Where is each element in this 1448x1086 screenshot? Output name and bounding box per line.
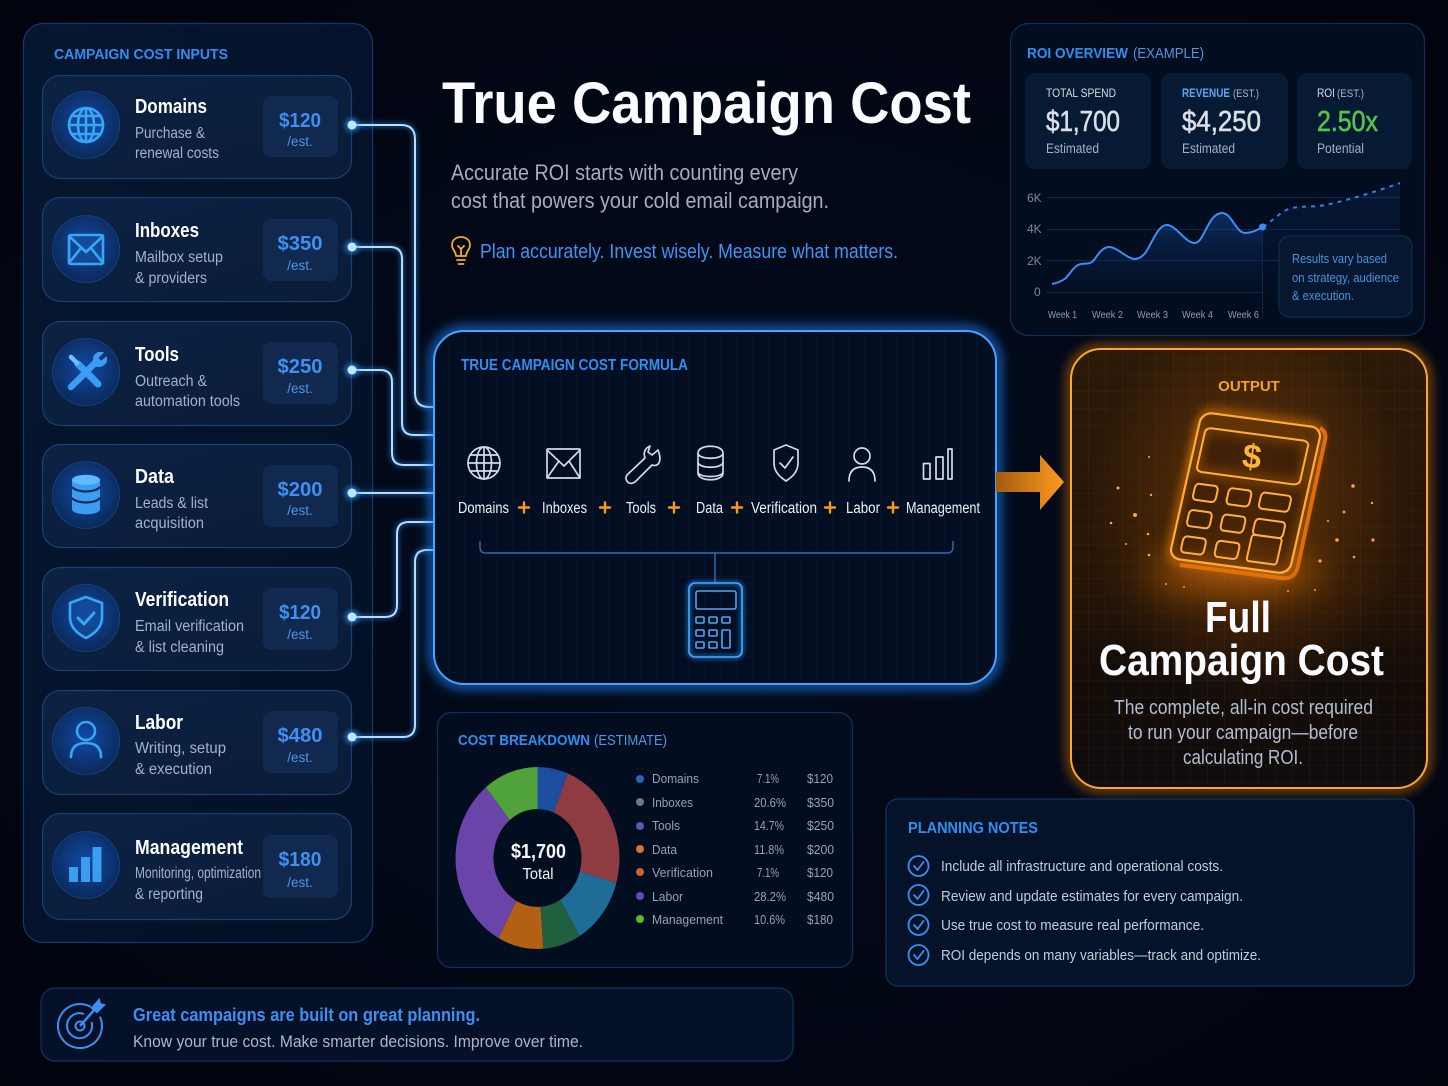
line chart: 4K xyxy=(1027,222,1042,236)
stat: revenue xyxy=(1161,73,1288,169)
price: data: /est. xyxy=(287,503,313,518)
icon: database xyxy=(52,462,120,528)
stat: total spend: $1,700 xyxy=(1046,106,1120,138)
output description xyxy=(1114,697,1373,769)
formula icons xyxy=(468,445,952,483)
title: True Campaign Cost xyxy=(442,71,971,136)
stat: revenue: REVENUE xyxy=(1182,86,1230,100)
breakdown heading: (ESTIMATE) xyxy=(594,733,667,749)
price: labor: /est. xyxy=(287,750,313,765)
price: tools xyxy=(263,342,338,404)
notes list: ROI depends on many variables—track and optimize. xyxy=(941,947,1261,964)
legend: $250 xyxy=(807,819,834,833)
notes heading: PLANNING NOTES xyxy=(908,820,1038,837)
card: management xyxy=(42,814,352,920)
card: labor: & execution xyxy=(135,761,212,778)
legend: 7.1% xyxy=(757,772,779,786)
card: verification: Verification xyxy=(135,589,229,611)
calculator illustration xyxy=(1110,412,1375,592)
legend: $120 xyxy=(807,866,833,880)
formula labels: Inboxes xyxy=(542,500,587,517)
legend xyxy=(636,772,834,927)
output description: calculating ROI. xyxy=(1183,747,1303,769)
notes list: Review and update estimates for every campaign. xyxy=(941,888,1243,905)
legend: Management xyxy=(652,913,724,927)
intro text: Accurate ROI starts with counting every xyxy=(451,160,799,185)
notes list xyxy=(941,858,1261,964)
panel: ROI overview xyxy=(1010,24,1424,336)
card: tools: automation tools xyxy=(135,393,240,410)
intro text: cost that powers your cold email campaign. xyxy=(451,188,829,213)
breakdown heading: COST BREAKDOWN xyxy=(458,733,590,749)
price: management: /est. xyxy=(287,875,313,890)
panel: planning notes xyxy=(886,799,1414,986)
stat: revenue: Estimated xyxy=(1182,141,1235,156)
panel: output xyxy=(1071,349,1427,788)
ROI heading xyxy=(1027,45,1204,62)
line chart xyxy=(1027,183,1400,321)
panel: campaign cost inputs xyxy=(24,24,372,942)
price: domains: $120 xyxy=(279,110,321,132)
card: management: Management xyxy=(135,837,243,859)
icon: light bulb xyxy=(452,237,470,264)
banner: great planning xyxy=(41,988,793,1061)
notes list: Include all infrastructure and operational costs. xyxy=(941,858,1223,875)
card: inboxes xyxy=(42,198,352,302)
price: tools: $250 xyxy=(278,356,322,378)
formula labels xyxy=(458,500,981,517)
legend: Domains xyxy=(652,772,699,786)
card: data: Leads & list xyxy=(135,495,209,512)
icon: person xyxy=(52,708,120,774)
formula labels: Verification xyxy=(751,500,817,517)
stat: total spend: Estimated xyxy=(1046,141,1099,156)
legend: 14.7% xyxy=(754,819,784,833)
icon: envelope xyxy=(52,216,120,282)
icon: shield xyxy=(52,584,120,652)
price: data xyxy=(263,465,338,527)
price: verification: $120 xyxy=(279,602,321,624)
card: management: Monitoring, optimization xyxy=(135,865,261,882)
legend: Inboxes xyxy=(652,796,693,810)
card: labor: Labor xyxy=(135,712,183,734)
stat: ROI: 2.50x xyxy=(1317,106,1378,138)
legend: Verification xyxy=(652,866,713,880)
note: results vary: Results vary based xyxy=(1292,252,1387,266)
line chart: Week 4 xyxy=(1182,309,1213,321)
formula labels: Domains xyxy=(458,500,509,517)
legend: $120 xyxy=(807,772,833,786)
card: domains: Purchase & xyxy=(135,125,206,142)
legend: Labor xyxy=(652,890,683,904)
icon: calculator xyxy=(689,583,742,657)
stat: ROI: (EST.) xyxy=(1337,88,1364,100)
stat: revenue: $4,250 xyxy=(1182,106,1261,138)
price: tools: /est. xyxy=(287,381,313,396)
calculator illustration: $ xyxy=(1240,437,1264,477)
icon: globe xyxy=(52,92,120,158)
arrow: formula to output xyxy=(996,455,1064,510)
notes list: Use true cost to measure real performance. xyxy=(941,917,1204,934)
output title: Campaign Cost xyxy=(1099,636,1384,685)
price: inboxes: /est. xyxy=(287,258,313,273)
price: management xyxy=(263,835,338,898)
line chart: 6K xyxy=(1027,191,1042,205)
bracket xyxy=(480,541,953,583)
ROI heading: (EXAMPLE) xyxy=(1133,45,1204,62)
price: verification: /est. xyxy=(287,627,313,642)
price: domains xyxy=(263,96,338,157)
legend: Tools xyxy=(652,819,680,833)
price: inboxes xyxy=(263,219,338,281)
legend: 28.2% xyxy=(754,890,786,904)
price: labor: $480 xyxy=(278,725,322,747)
line chart: Week 6 xyxy=(1228,309,1259,321)
icon: target xyxy=(58,1000,104,1048)
panel: formula xyxy=(434,331,996,684)
note: results vary: on strategy, audience xyxy=(1292,271,1399,285)
tagline: Plan accurately. Invest wisely. Measure what matters. xyxy=(480,240,898,263)
note: results vary: & execution. xyxy=(1292,289,1354,303)
card: verification: & list cleaning xyxy=(135,639,224,656)
line chart: Week 3 xyxy=(1137,309,1168,321)
card: labor: Writing, setup xyxy=(135,740,226,757)
line chart: Week 1 xyxy=(1048,309,1077,321)
card: domains: Domains xyxy=(135,96,207,118)
card: domains: renewal costs xyxy=(135,145,219,162)
card: verification: Email verification xyxy=(135,618,244,635)
card: verification xyxy=(42,568,352,670)
panel heading: CAMPAIGN COST INPUTS xyxy=(54,46,228,63)
stat: total spend: TOTAL SPEND xyxy=(1046,86,1116,100)
icon: wrench and screwdriver xyxy=(52,338,120,406)
price: domains: /est. xyxy=(287,134,313,149)
legend: $200 xyxy=(807,843,834,857)
card: tools: Tools xyxy=(135,344,179,366)
legend: $480 xyxy=(807,890,834,904)
banner: great planning: Know your true cost. Make smarter decisions. Improve over time. xyxy=(133,1033,583,1051)
legend: 20.6% xyxy=(754,796,786,810)
note: results vary xyxy=(1279,236,1412,317)
price: inboxes: $350 xyxy=(278,233,322,255)
plus signs xyxy=(519,502,898,512)
donut total xyxy=(511,841,566,883)
price: labor xyxy=(263,711,338,773)
card: inboxes: Mailbox setup xyxy=(135,249,223,266)
stat: ROI: ROI xyxy=(1317,86,1335,100)
check icons xyxy=(908,856,928,965)
card: tools: Outreach & xyxy=(135,373,208,390)
donut chart xyxy=(456,767,619,949)
icon: bar chart xyxy=(52,832,120,898)
formula labels: Data xyxy=(696,500,723,517)
stat: ROI: Potential xyxy=(1317,141,1364,156)
output heading: OUTPUT xyxy=(1218,378,1280,395)
card: data xyxy=(42,444,352,548)
output title xyxy=(1099,593,1384,685)
output description: to run your campaign—before xyxy=(1128,722,1358,744)
connectors: inputs to formula xyxy=(345,118,434,744)
line chart: 2K xyxy=(1027,254,1042,268)
donut total: $1,700 xyxy=(511,841,566,863)
card: inboxes: & providers xyxy=(135,270,207,287)
legend: 7.1% xyxy=(757,866,779,880)
card: tools xyxy=(42,322,352,426)
formula labels: Tools xyxy=(626,500,656,517)
stat: revenue: (EST.) xyxy=(1233,88,1259,100)
output description: The complete, all-in cost required xyxy=(1114,697,1373,719)
legend: 11.8% xyxy=(754,843,784,857)
card: management: & reporting xyxy=(135,886,203,903)
breakdown heading xyxy=(458,733,667,749)
ROI heading: ROI OVERVIEW xyxy=(1027,45,1129,62)
output title: Full xyxy=(1205,593,1271,642)
card: labor xyxy=(42,690,352,794)
line chart: 0 xyxy=(1034,285,1041,299)
card: domains xyxy=(42,76,352,178)
price: data: $200 xyxy=(278,479,322,501)
price: verification xyxy=(263,588,338,650)
formula heading: TRUE CAMPAIGN COST FORMULA xyxy=(461,357,688,374)
legend: $180 xyxy=(807,913,833,927)
panel: cost breakdown xyxy=(438,712,852,968)
legend: Data xyxy=(652,843,677,857)
legend: $350 xyxy=(807,796,834,810)
donut total: Total xyxy=(522,866,554,883)
stat: total spend xyxy=(1025,73,1151,169)
legend: 10.6% xyxy=(754,913,785,927)
banner text: Great campaigns are built on great planning. xyxy=(133,1005,480,1025)
intro text xyxy=(451,160,829,213)
stat: ROI xyxy=(1297,73,1412,169)
card: data: acquisition xyxy=(135,515,204,532)
card: inboxes: Inboxes xyxy=(135,220,199,242)
formula labels: Management xyxy=(906,500,981,517)
line chart: Week 2 xyxy=(1092,309,1123,321)
card: data: Data xyxy=(135,466,175,488)
price: management: $180 xyxy=(278,849,322,871)
formula labels: Labor xyxy=(846,500,880,517)
